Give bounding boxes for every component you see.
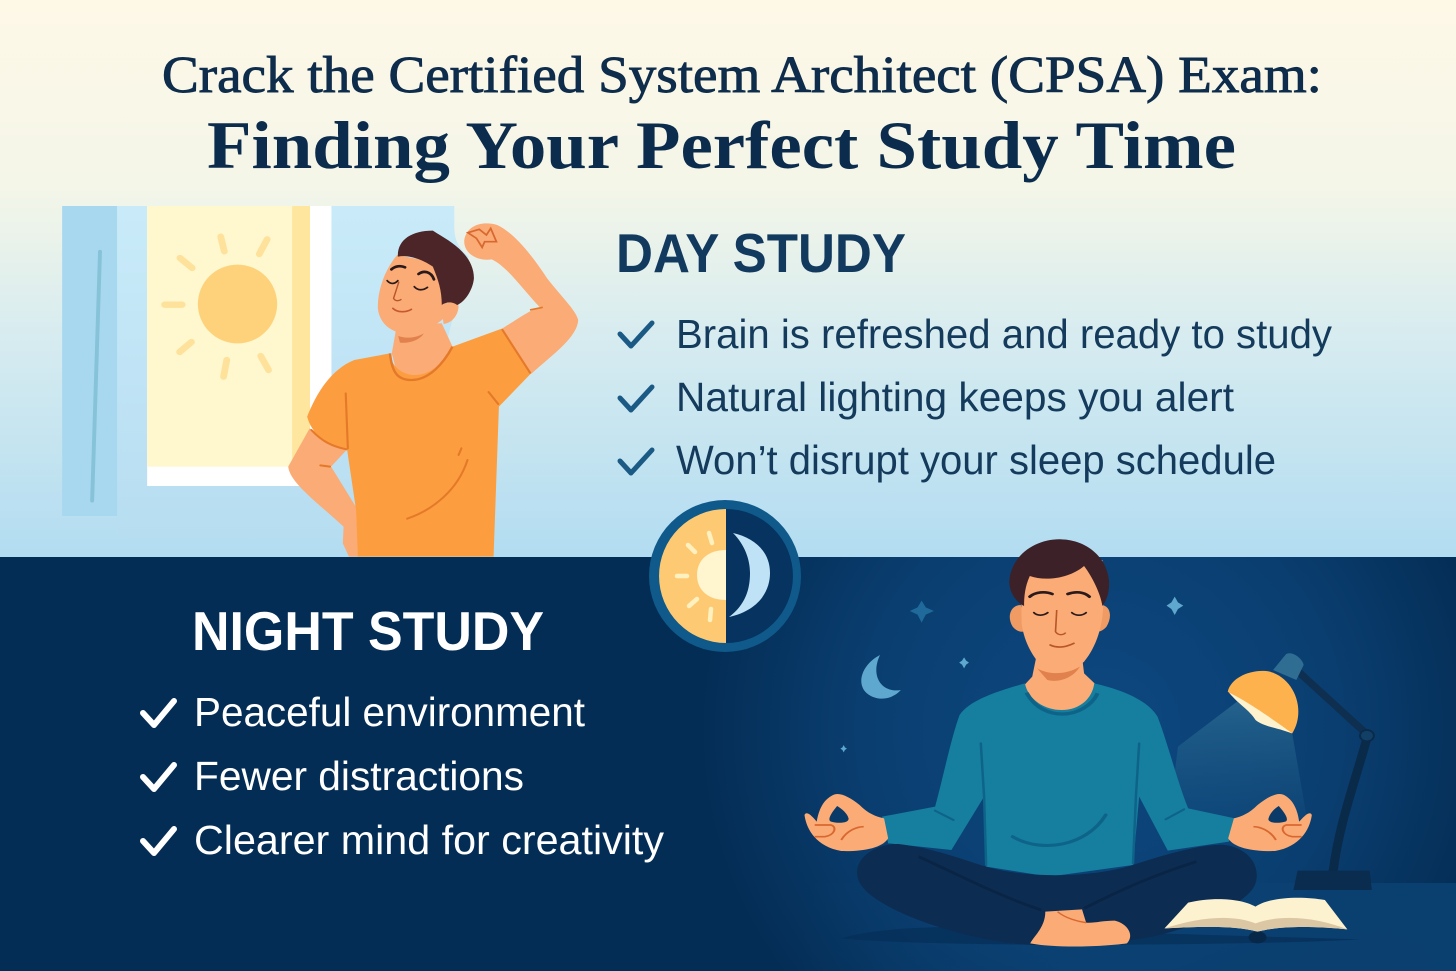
title line 1: Crack the Certified System Architect (CPSA) Exam:	[162, 47, 1322, 104]
shirt	[307, 328, 531, 557]
foot	[1030, 909, 1130, 946]
icon: lamp	[1228, 653, 1374, 890]
neck	[1023, 657, 1096, 713]
sweater	[882, 683, 1235, 877]
night study heading: NIGHT STUDY	[192, 600, 544, 662]
icon: open book	[1164, 898, 1347, 943]
legs	[857, 844, 1257, 945]
head	[1009, 539, 1110, 672]
floor shadow	[841, 927, 1360, 945]
fist detail	[468, 228, 496, 247]
raised arm	[464, 223, 578, 374]
day man illustration	[288, 223, 578, 557]
icon: moon	[861, 655, 901, 699]
day study heading: DAY STUDY	[616, 222, 906, 284]
icon: day night badge	[649, 500, 801, 652]
left hand	[804, 794, 888, 851]
item: peaceful: Peaceful environment	[194, 689, 586, 735]
item: sleep schedule: Won’t disrupt your sleep schedule	[676, 437, 1276, 483]
title	[162, 47, 1322, 183]
icon: sun	[165, 237, 277, 377]
night man illustration	[804, 539, 1374, 946]
icon: stars	[840, 597, 1183, 752]
floor	[800, 883, 1456, 971]
window scene	[62, 206, 469, 537]
title line 2: Finding Your Perfect Study Time	[207, 107, 1236, 183]
night background	[0, 557, 1456, 971]
head	[378, 231, 474, 333]
item: fewer distractions: Fewer distractions	[194, 753, 524, 799]
window	[147, 206, 331, 486]
curtain	[62, 206, 117, 516]
night study list	[143, 689, 665, 863]
day study list	[620, 311, 1332, 483]
left arm	[288, 428, 360, 557]
item: clearer mind: Clearer mind for creativity	[194, 817, 665, 863]
item: natural lighting: Natural lighting keeps you alert	[676, 374, 1235, 420]
wall panel	[117, 206, 469, 537]
day background	[0, 0, 1456, 558]
item: brain refreshed: Brain is refreshed and ready to study	[676, 311, 1332, 357]
right hand	[1228, 794, 1312, 851]
lamp light beam	[1172, 700, 1307, 850]
neck	[392, 323, 452, 380]
